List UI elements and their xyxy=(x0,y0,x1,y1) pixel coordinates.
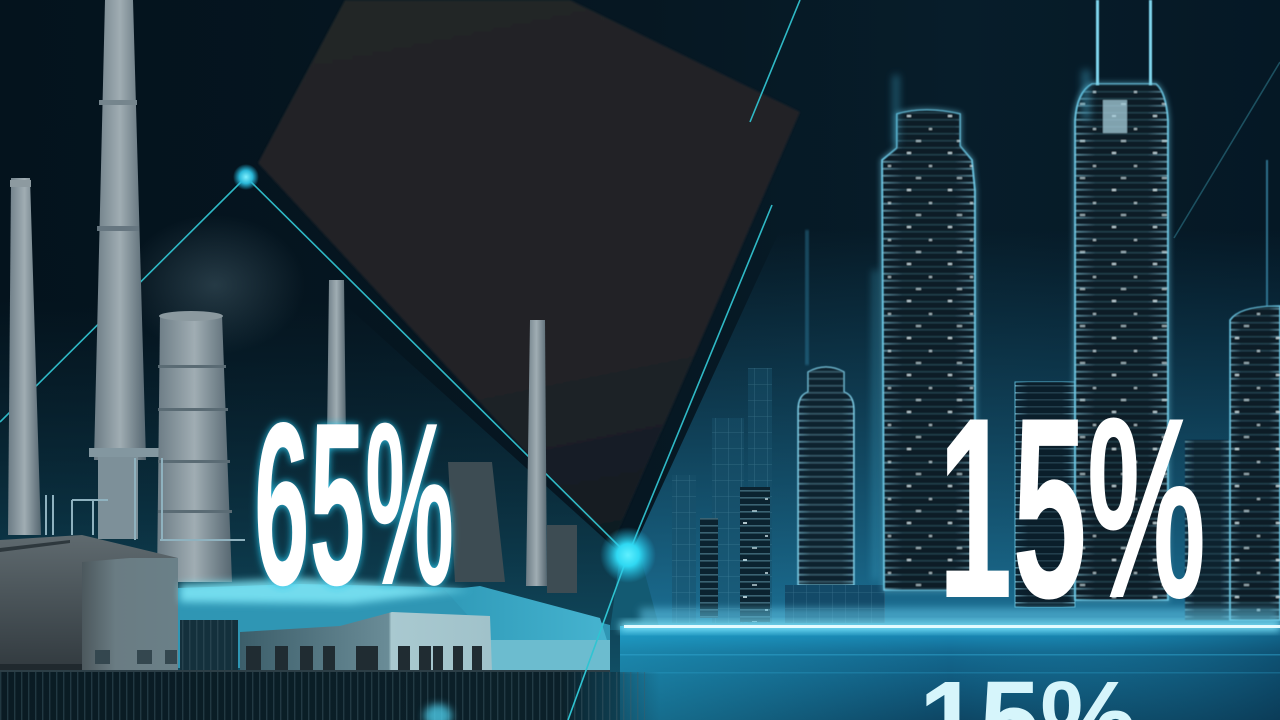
dark grey panel xyxy=(258,0,800,545)
towers far right xyxy=(1185,160,1280,620)
chimney left xyxy=(8,178,41,535)
left shed xyxy=(0,535,178,690)
node: top xyxy=(233,164,259,190)
cyan roof building xyxy=(178,584,610,675)
bottom glow dot xyxy=(424,704,452,720)
factory xyxy=(0,0,610,690)
tower large left xyxy=(882,110,975,590)
node: bottom xyxy=(600,527,656,583)
tower behind 15 xyxy=(1015,382,1075,607)
middle chimney xyxy=(327,280,346,440)
diagonal line network xyxy=(0,0,1280,555)
infographic scene: 65% xyxy=(254,375,454,634)
side block xyxy=(547,525,577,593)
right city fog xyxy=(628,230,1280,630)
silo xyxy=(157,311,232,582)
glow under 65 xyxy=(180,578,470,604)
right chimney xyxy=(526,320,547,586)
glowing horizon xyxy=(620,622,1280,631)
foreground pier xyxy=(0,670,660,720)
left teal fog xyxy=(0,300,628,720)
tower tall right xyxy=(1075,0,1168,600)
fog join under node xyxy=(610,555,660,630)
water reflection xyxy=(620,626,1280,720)
cooling tower xyxy=(448,462,505,582)
smoke haze xyxy=(125,215,305,355)
wireframe back towers xyxy=(672,230,809,623)
scaffold xyxy=(46,458,245,540)
city base lights xyxy=(640,608,1280,624)
line below bottom node xyxy=(568,555,628,720)
city skyline xyxy=(640,0,1280,624)
white building xyxy=(240,612,492,672)
dark towers left of centre xyxy=(700,487,770,622)
spire glows xyxy=(873,70,1090,580)
tall chimney xyxy=(89,0,165,539)
low podium xyxy=(785,585,885,623)
tower small centre xyxy=(798,367,854,585)
